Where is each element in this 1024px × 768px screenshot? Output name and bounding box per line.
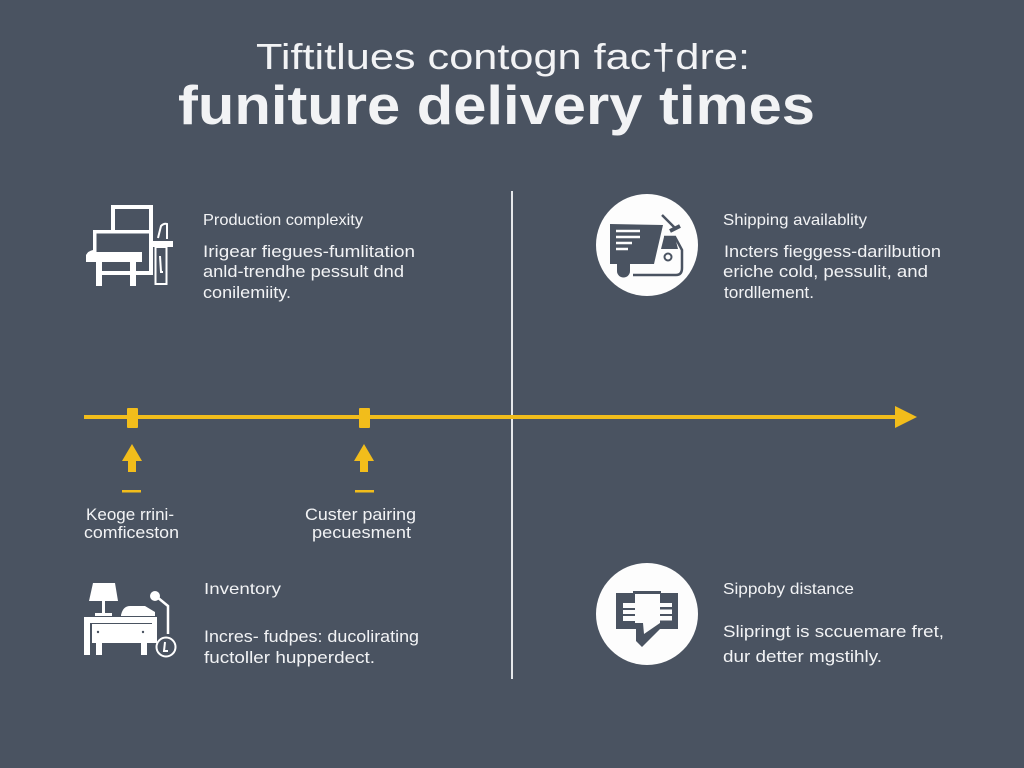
heading: inventory: Inventory	[204, 581, 281, 598]
text: distance description	[723, 622, 944, 666]
panel: shipping distance	[596, 563, 944, 666]
heading: production complexity: Production complexity	[203, 212, 363, 229]
text: inventory description: Incres- fudpes: ducolirating	[204, 627, 419, 646]
heading: shipping availability: Shipping availablity	[723, 212, 867, 229]
text: production description	[203, 242, 415, 302]
icon: up arrow 2	[354, 444, 374, 472]
label: second milestone	[305, 506, 416, 542]
title: Tiftitlues contogn fac†dre:	[256, 36, 750, 77]
panel: inventory	[84, 581, 419, 667]
text: production description: conilemiity.	[203, 283, 291, 302]
icon: delivery truck in circle	[596, 194, 698, 296]
icon: up arrow 1	[122, 444, 142, 472]
text: inventory description	[204, 627, 419, 667]
icon: speech bubble in circle	[596, 563, 698, 665]
icon: desk with lamp	[84, 583, 176, 656]
milestone: second	[305, 444, 416, 542]
text: shipping description: eriche cold, pessulit, and	[723, 262, 928, 281]
text: production description: Irigear fiegues-fumlitation	[203, 242, 415, 261]
panel: shipping availability	[596, 194, 941, 302]
label: second milestone: Custer pairing	[305, 506, 416, 524]
text: shipping description: tordllement.	[724, 283, 814, 302]
label: first milestone: Keoge rrini-	[86, 506, 174, 524]
timeline marker 2	[359, 408, 370, 428]
milestone: first	[84, 444, 179, 542]
text: shipping description	[723, 242, 941, 302]
label: second milestone: pecuesment	[312, 524, 411, 542]
label: first milestone: comficeston	[84, 524, 179, 542]
text: distance description: Slipringt is sccuemare fret,	[723, 622, 944, 641]
heading: shipping distance: Sippoby distance	[723, 581, 854, 598]
timeline marker 1	[127, 408, 138, 428]
text: shipping description: Incters fieggess-darilbution	[724, 242, 941, 261]
vertical divider	[511, 191, 513, 679]
icon: piano-like furniture	[86, 205, 173, 286]
text: inventory description: fuctoller hupperdect.	[204, 648, 375, 667]
timeline arrow	[84, 406, 917, 428]
text: production description: anld-trendhe pessult dnd	[203, 262, 404, 281]
panel: production complexity	[86, 205, 415, 302]
title: funiture delivery times	[178, 74, 815, 136]
title	[178, 36, 815, 136]
label: first milestone	[84, 506, 179, 542]
text: distance description: dur detter mgstihly.	[723, 647, 882, 666]
